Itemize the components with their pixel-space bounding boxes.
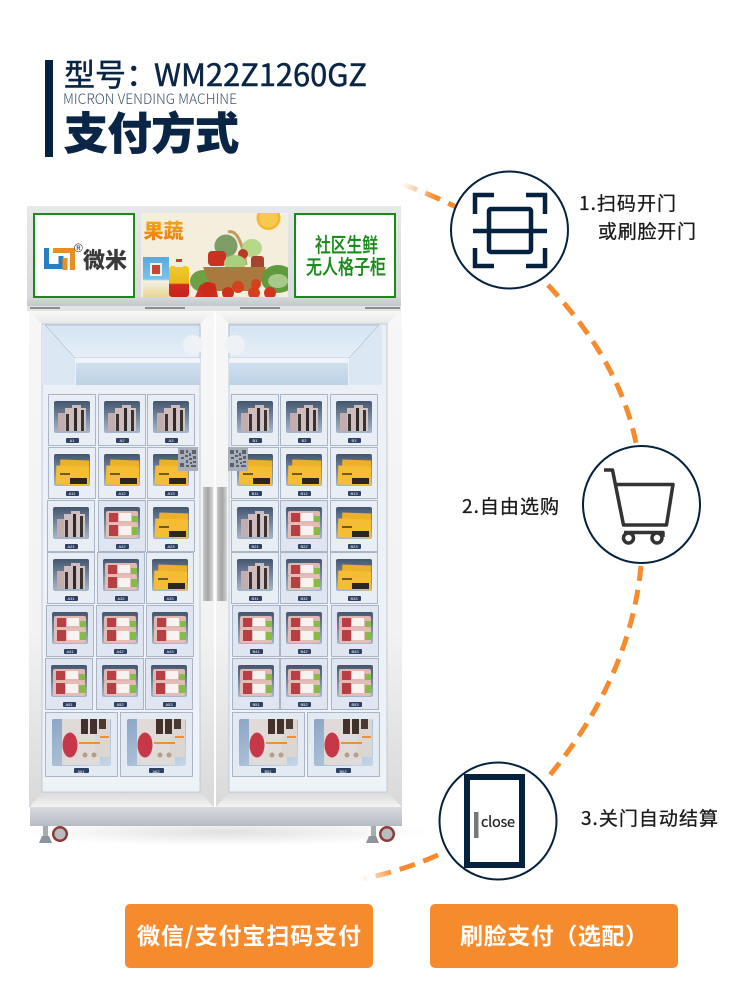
logo text: 微米 xyxy=(83,243,127,275)
locker number labels: A43 xyxy=(166,649,174,654)
dashed flow path xyxy=(362,184,641,879)
locker number labels: B31 xyxy=(251,596,259,601)
sign text line 2: 无人格子柜 xyxy=(306,251,386,280)
title accent bar xyxy=(45,60,53,157)
banner heading: 果蔬 xyxy=(144,215,184,244)
cabinet base xyxy=(30,807,402,826)
model number heading xyxy=(64,50,367,95)
vending machine xyxy=(20,206,430,846)
locker number labels: B62 xyxy=(339,769,347,774)
locker number labels: B41 xyxy=(252,649,260,654)
vegetable basket xyxy=(190,232,295,299)
step 3 circle: closed door icon xyxy=(440,762,556,880)
model number heading: 型号： xyxy=(64,50,157,95)
locker number labels: A21 xyxy=(67,544,75,549)
locker row 3 xyxy=(48,500,194,552)
step 1 label: 1.扫码开门 xyxy=(579,189,676,216)
QR code xyxy=(228,447,248,471)
subtitle: MICRON VENDING MACHINE xyxy=(63,88,237,109)
QR code xyxy=(178,447,198,471)
locker number labels: A13 xyxy=(167,491,175,496)
locker number labels: A52 xyxy=(116,702,124,707)
step 2 circle: shopping cart icon xyxy=(583,446,700,563)
locker number labels: A51 xyxy=(65,702,73,707)
locker number labels: B21 xyxy=(251,544,259,549)
locker number labels: A61 xyxy=(77,769,85,774)
payment button: WeChat / Alipay: 微信/支付宝扫码支付 xyxy=(137,917,361,951)
locker number labels: A32 xyxy=(117,596,125,601)
main title: 支付方式 xyxy=(64,98,239,162)
orange slice xyxy=(256,213,280,230)
locker number labels: A31 xyxy=(67,596,75,601)
locker number labels xyxy=(251,438,359,774)
step 2 label: 2.自由选购 xyxy=(462,492,559,519)
payment button: WeChat / Alipay xyxy=(125,904,373,968)
payment button: face pay: 刷脸支付（选配） xyxy=(460,917,648,951)
door handle xyxy=(217,487,227,601)
rice bag xyxy=(143,257,169,297)
centre banner: fruit and vegetables xyxy=(141,213,288,297)
locker number labels: B12 xyxy=(300,491,308,496)
model number heading: WM22Z1260GZ xyxy=(154,50,367,95)
locker row 2 xyxy=(232,448,378,498)
locker row 6 xyxy=(46,658,192,710)
locker number labels: B22 xyxy=(300,544,308,549)
locker number labels: B53 xyxy=(351,702,359,707)
locker number labels: A62 xyxy=(152,769,160,774)
locker number labels: B32 xyxy=(300,596,308,601)
logo mark xyxy=(46,248,72,270)
locker row 6 xyxy=(232,658,378,710)
right door xyxy=(216,311,402,807)
casters xyxy=(39,826,395,843)
header panel xyxy=(27,206,401,311)
sign text line 1: 社区生鲜 xyxy=(315,229,378,258)
locker number labels: B3 xyxy=(352,438,357,443)
locker number labels: B11 xyxy=(252,491,259,496)
step 3 circle: closed door icon: close xyxy=(481,811,515,832)
step 1 circle: scan icon xyxy=(451,172,568,288)
door handle xyxy=(203,487,213,601)
locker row 2 xyxy=(48,448,194,498)
locker row 3 xyxy=(232,500,378,552)
floor shadow xyxy=(20,818,430,846)
locker number labels: A53 xyxy=(165,702,173,707)
logo panel xyxy=(34,214,134,297)
locker row 1 xyxy=(48,394,194,446)
locker number labels: A22 xyxy=(118,544,126,549)
locker row 5 xyxy=(46,606,194,656)
left door xyxy=(29,311,214,807)
locker number labels: A41 xyxy=(66,649,74,654)
locker row 1 xyxy=(232,394,378,446)
locker number labels: A2 xyxy=(120,438,125,443)
registered mark: ® xyxy=(74,241,83,255)
cooling hood xyxy=(42,325,203,385)
locker row 4 xyxy=(232,552,378,604)
locker number labels: B42 xyxy=(300,649,308,654)
locker number labels: B33 xyxy=(350,596,358,601)
locker row 5 xyxy=(232,606,378,656)
locker number labels: B51 xyxy=(252,702,260,707)
right sign panel xyxy=(295,214,395,297)
locker row 7 xyxy=(232,712,380,776)
locker number labels: B43 xyxy=(351,649,359,654)
locker number labels: B1 xyxy=(253,438,258,443)
locker row 4 xyxy=(48,552,194,604)
locker number labels xyxy=(65,438,175,774)
locker number labels: B52 xyxy=(300,702,308,707)
locker row 7 xyxy=(46,712,192,776)
locker number labels: A12 xyxy=(118,491,126,496)
locker number labels: A33 xyxy=(166,596,174,601)
locker number labels: A3 xyxy=(169,438,174,443)
step 1 label: 或刷脸开门 xyxy=(598,217,696,244)
locker number labels: A11 xyxy=(69,491,76,496)
locker number labels: A23 xyxy=(167,544,175,549)
step 3 label: 3.关门自动结算 xyxy=(581,804,718,831)
locker number labels: A1 xyxy=(70,438,75,443)
locker number labels: B61 xyxy=(264,769,272,774)
step 1 label xyxy=(579,189,696,244)
oil bottle xyxy=(169,259,189,297)
locker number labels: A42 xyxy=(116,649,124,654)
locker number labels: B13 xyxy=(350,491,358,496)
locker number labels: B23 xyxy=(350,544,358,549)
payment button: face pay xyxy=(430,904,678,968)
locker number labels: B2 xyxy=(302,438,307,443)
cooling hood xyxy=(225,325,382,385)
